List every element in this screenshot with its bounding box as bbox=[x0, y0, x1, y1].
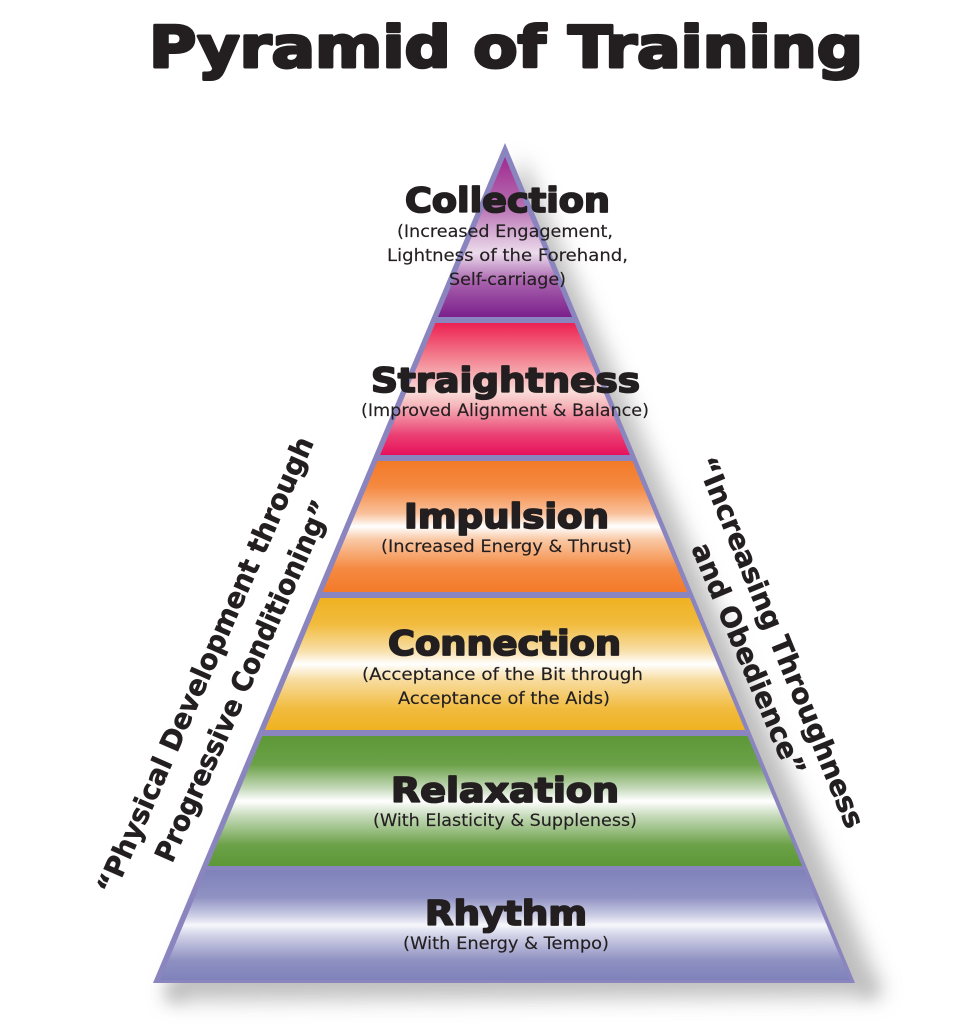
label: collection: Self-carriage) bbox=[449, 270, 566, 290]
right side caption: “Increasing Throughness bbox=[690, 452, 871, 833]
label: relaxation: (With Elasticity & Suppleness) bbox=[373, 811, 637, 831]
pyramid frame bbox=[153, 143, 855, 983]
label: collection: Collection bbox=[405, 181, 610, 221]
pyramid drop shadow bbox=[165, 158, 884, 1002]
label: relaxation: Relaxation bbox=[391, 771, 619, 811]
label: connection bbox=[362, 624, 643, 709]
right side caption: and Obedience” bbox=[685, 538, 812, 781]
label: collection bbox=[387, 181, 628, 290]
label: connection: (Acceptance of the Bit through bbox=[362, 665, 643, 685]
band: rhythm bbox=[160, 870, 850, 980]
label: impulsion: Impulsion bbox=[404, 497, 609, 537]
left side caption: Progressive Conditioning” bbox=[148, 495, 338, 867]
label: straightness: (Improved Alignment & Balance) bbox=[361, 401, 649, 421]
label: rhythm: (With Energy & Tempo) bbox=[403, 934, 609, 954]
label: collection: (Increased Engagement, bbox=[397, 222, 613, 242]
label: relaxation bbox=[373, 771, 637, 831]
band: relaxation bbox=[208, 736, 802, 866]
pyramid bbox=[153, 143, 855, 983]
label: impulsion: (Increased Energy & Thrust) bbox=[381, 537, 632, 557]
label: rhythm bbox=[403, 894, 609, 954]
label: straightness: Straightness bbox=[371, 361, 640, 401]
band: straightness bbox=[380, 323, 630, 455]
label: rhythm: Rhythm bbox=[425, 894, 587, 934]
band: connection bbox=[265, 598, 745, 730]
label: straightness bbox=[361, 361, 649, 421]
title: Pyramid of Training bbox=[149, 15, 863, 81]
left side caption: “Physical Development through bbox=[90, 432, 321, 899]
band: impulsion bbox=[323, 461, 687, 592]
label: impulsion bbox=[381, 497, 632, 557]
label: connection: Acceptance of the Aids) bbox=[398, 689, 610, 709]
label: connection: Connection bbox=[388, 624, 621, 664]
label: collection: Lightness of the Forehand, bbox=[387, 246, 628, 266]
band: collection bbox=[438, 157, 572, 317]
